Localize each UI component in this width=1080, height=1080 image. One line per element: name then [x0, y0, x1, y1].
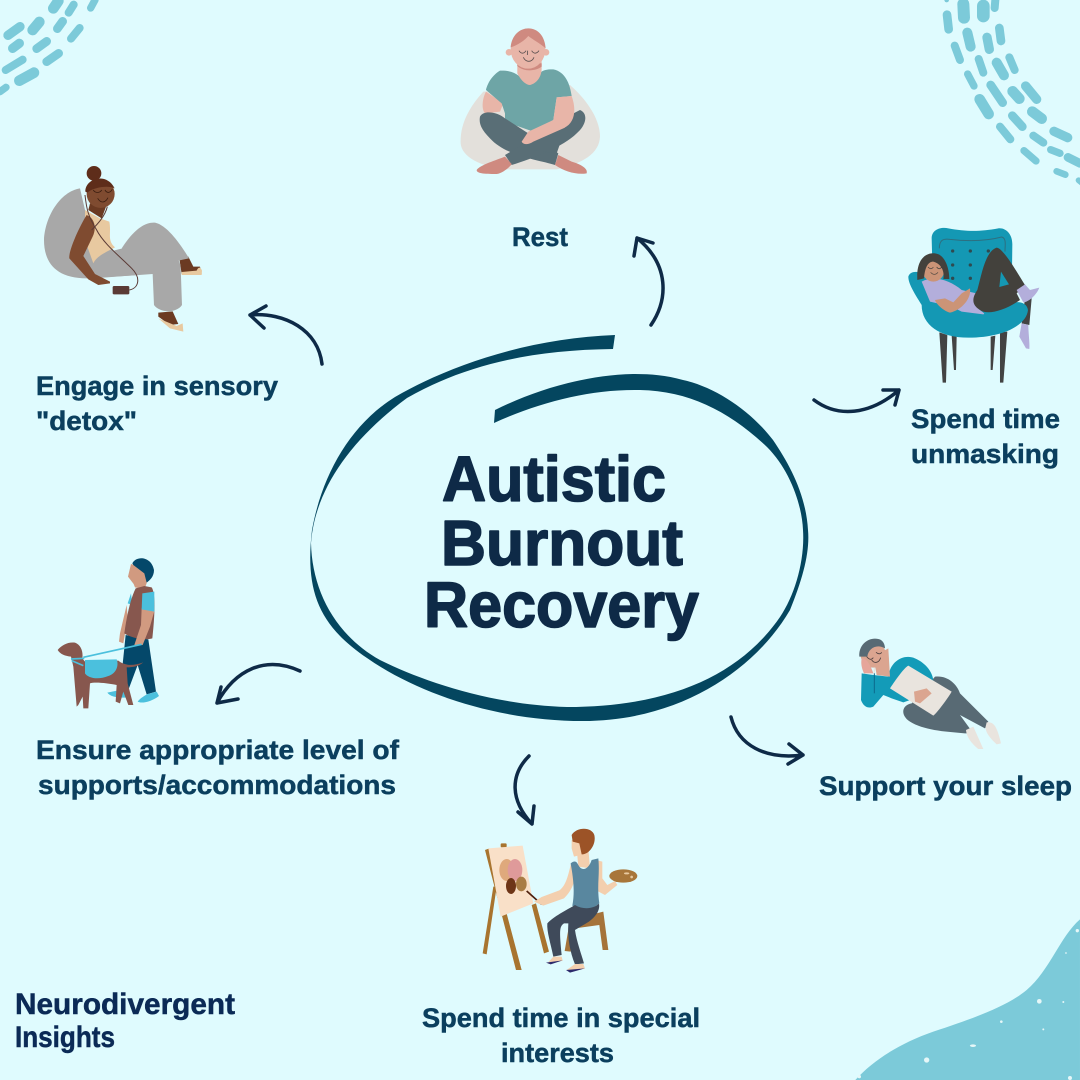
label: supports: supports/accommodations: [38, 770, 396, 800]
title: Recovery: [424, 569, 699, 641]
brand: Insights: [15, 1021, 115, 1054]
illustration: person sleeping with pillow: [859, 639, 1001, 749]
illustration: person resting on beanbag: [461, 28, 600, 174]
label: special interests: [422, 1003, 700, 1068]
brand: [15, 988, 235, 1054]
label: supports: [36, 735, 400, 800]
illustration: person in teal armchair: [908, 228, 1039, 383]
decoration: top left dashes: [0, 0, 95, 92]
arrow to sensory detox: [250, 306, 322, 364]
label: unmasking: Spend time: [911, 404, 1060, 434]
label: special interests: interests: [501, 1038, 614, 1068]
label: unmasking: unmasking: [911, 439, 1059, 469]
arrow to sleep: [731, 717, 803, 764]
decoration: bottom right blob: [855, 919, 1080, 1080]
label: supports: Ensure appropriate level of: [36, 735, 400, 765]
decoration: top right dashes: [947, 0, 1080, 183]
label: sleep: Support your sleep: [819, 771, 1072, 801]
label: unmasking: [911, 404, 1060, 469]
label: sensory detox: "detox": [36, 406, 137, 436]
arrow to supports: [217, 665, 300, 703]
illustration: woman painting at easel: [483, 829, 637, 973]
label: sensory detox: [36, 371, 278, 436]
label: special interests: Spend time in special: [422, 1003, 700, 1033]
label: Rest: Rest: [512, 222, 568, 252]
brand: Neurodivergent: [15, 988, 235, 1021]
arrow to Rest: [634, 238, 663, 325]
label: sensory detox: Engage in sensory: [36, 371, 278, 401]
illustration: woman listening with earphones: [44, 166, 202, 332]
title: Burnout: [441, 507, 683, 579]
arrow to special interests: [515, 756, 534, 824]
illustration: man walking with service dog: [58, 558, 159, 708]
title: [424, 443, 699, 641]
central ring: [310, 335, 808, 721]
arrow to unmasking: [814, 390, 899, 411]
title: Autistic: [442, 443, 666, 515]
